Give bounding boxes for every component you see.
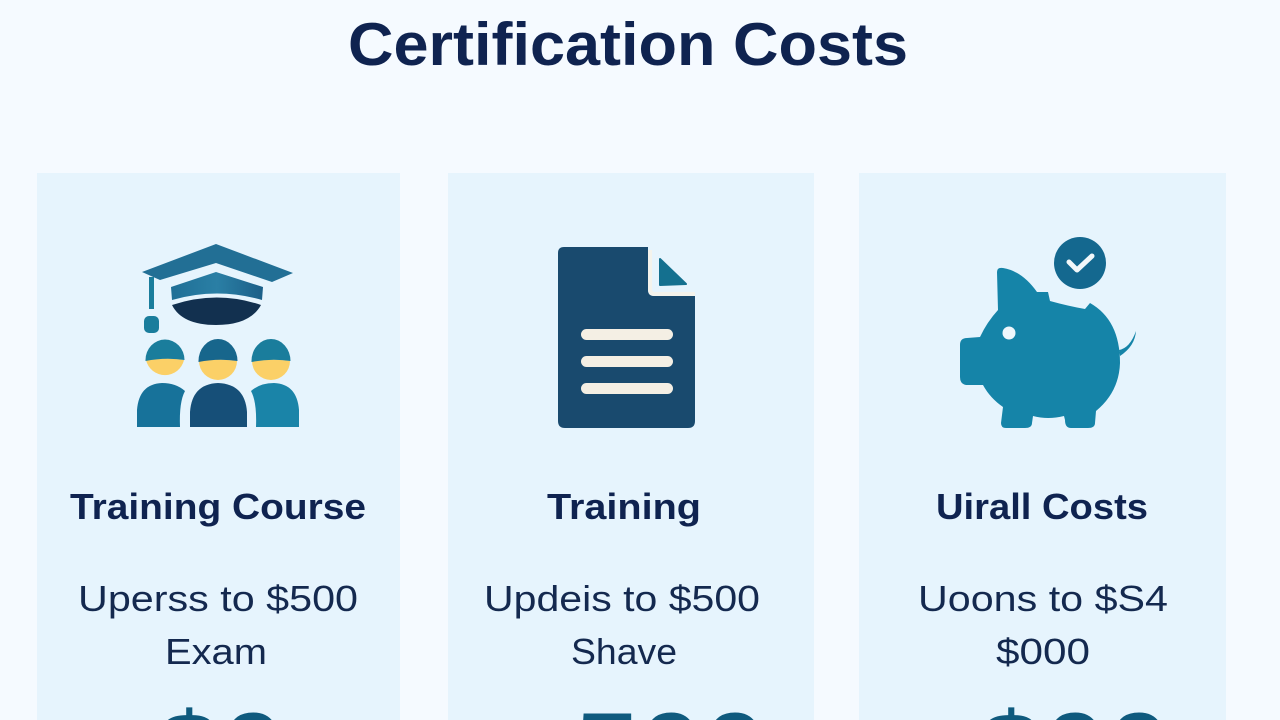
heading: overall costs: Uirall Costs [936,486,1148,527]
text: upper range: Uperss to $500 [78,578,358,619]
heading: training: Training [547,486,701,527]
title: Certification Costs [348,11,908,78]
panel: training [448,173,814,720]
panel: training course [37,173,400,720]
icon: piggy bank with check [960,237,1136,428]
icon: graduation cap and students [137,244,299,427]
panel: overall costs [859,173,1226,720]
icon: document [558,247,695,428]
text: updates range: Updeis to $500 [484,578,760,619]
text: exam: Exam [165,631,267,672]
heading: training course: Training Course [70,486,366,527]
text: upper range: Uoons to $S4 [918,578,1168,619]
text: shave: Shave [571,631,677,672]
text: amount: $000 [996,631,1090,672]
